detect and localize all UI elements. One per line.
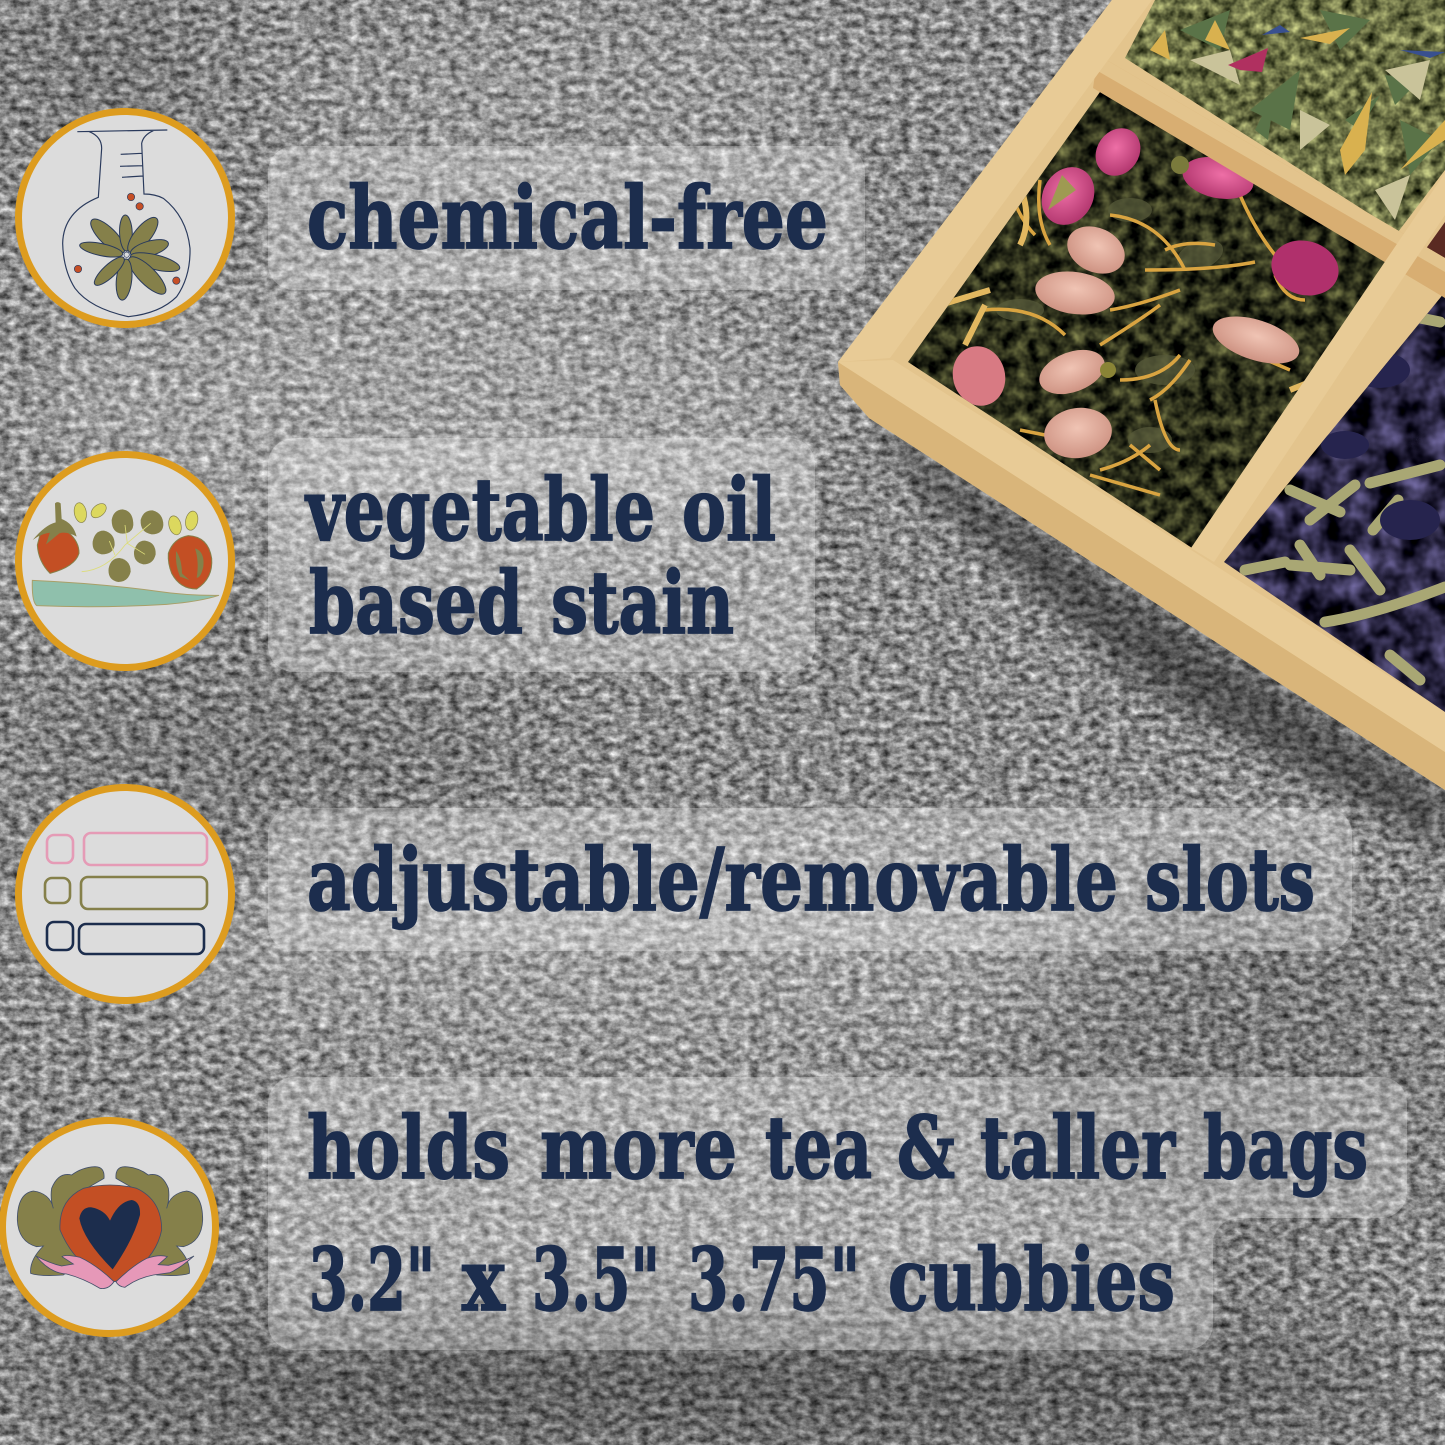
icon: adjustable slots [18,788,232,1000]
text block: holds more tea and taller bags: bags [1203,1098,1368,1199]
vertical divider [1191,173,1445,562]
text block: holds more tea and taller bags: taller [980,1098,1176,1199]
text block: holds more tea and taller bags [307,1098,1368,1331]
panel: adjustable slots [268,808,1352,951]
text block: holds more tea and taller bags: holds [307,1098,510,1199]
horizontal divider [1093,55,1445,298]
icon: vegetables [18,454,232,668]
text block: holds more tea and taller bags: & [897,1098,955,1199]
heading: chemical-free: chemical-free [307,168,828,269]
wooden tea box with compartments [838,0,1445,850]
text block: holds more tea and taller bags: 3.2" [309,1230,435,1331]
text block: holds more tea and taller bags: 3.5" [532,1230,660,1331]
text block: holds more tea and taller bags: cubbies [888,1230,1175,1331]
left wall [838,0,1152,362]
panel: chemical-free [268,146,865,290]
text block: holds more tea and taller bags: 3.75" [688,1230,860,1331]
text block: vegetable oil based stain: stain [551,553,734,654]
heading: adjustable/removable slots: adjustable/removable [307,830,1118,931]
text block: holds more tea and taller bags: tea [765,1098,872,1199]
small red tea corner [1425,222,1445,262]
text block: holds more tea and taller bags: more [540,1098,737,1199]
compartment: butterfly pea flowers [1220,290,1445,720]
compartment: herb leaves [1120,0,1445,240]
text block: vegetable oil based stain: vegetable [304,460,655,561]
text block: holds more tea and taller bags: x [462,1230,506,1331]
text block: vegetable oil based stain: based [309,553,523,654]
text block: vegetable oil based stain [304,460,776,654]
heading: adjustable/removable slots: slots [1145,830,1315,931]
rosebuds [946,119,1345,462]
compartment: green tea with rosebuds [908,92,1385,548]
panel: vegetable oil based stain [268,438,815,672]
box outer wood [838,0,1445,790]
icon: flask with flower [18,112,232,324]
icon: hands holding heart [2,1120,216,1334]
text block: vegetable oil based stain: oil [682,460,776,561]
panel: holds more tea [268,1077,1407,1350]
